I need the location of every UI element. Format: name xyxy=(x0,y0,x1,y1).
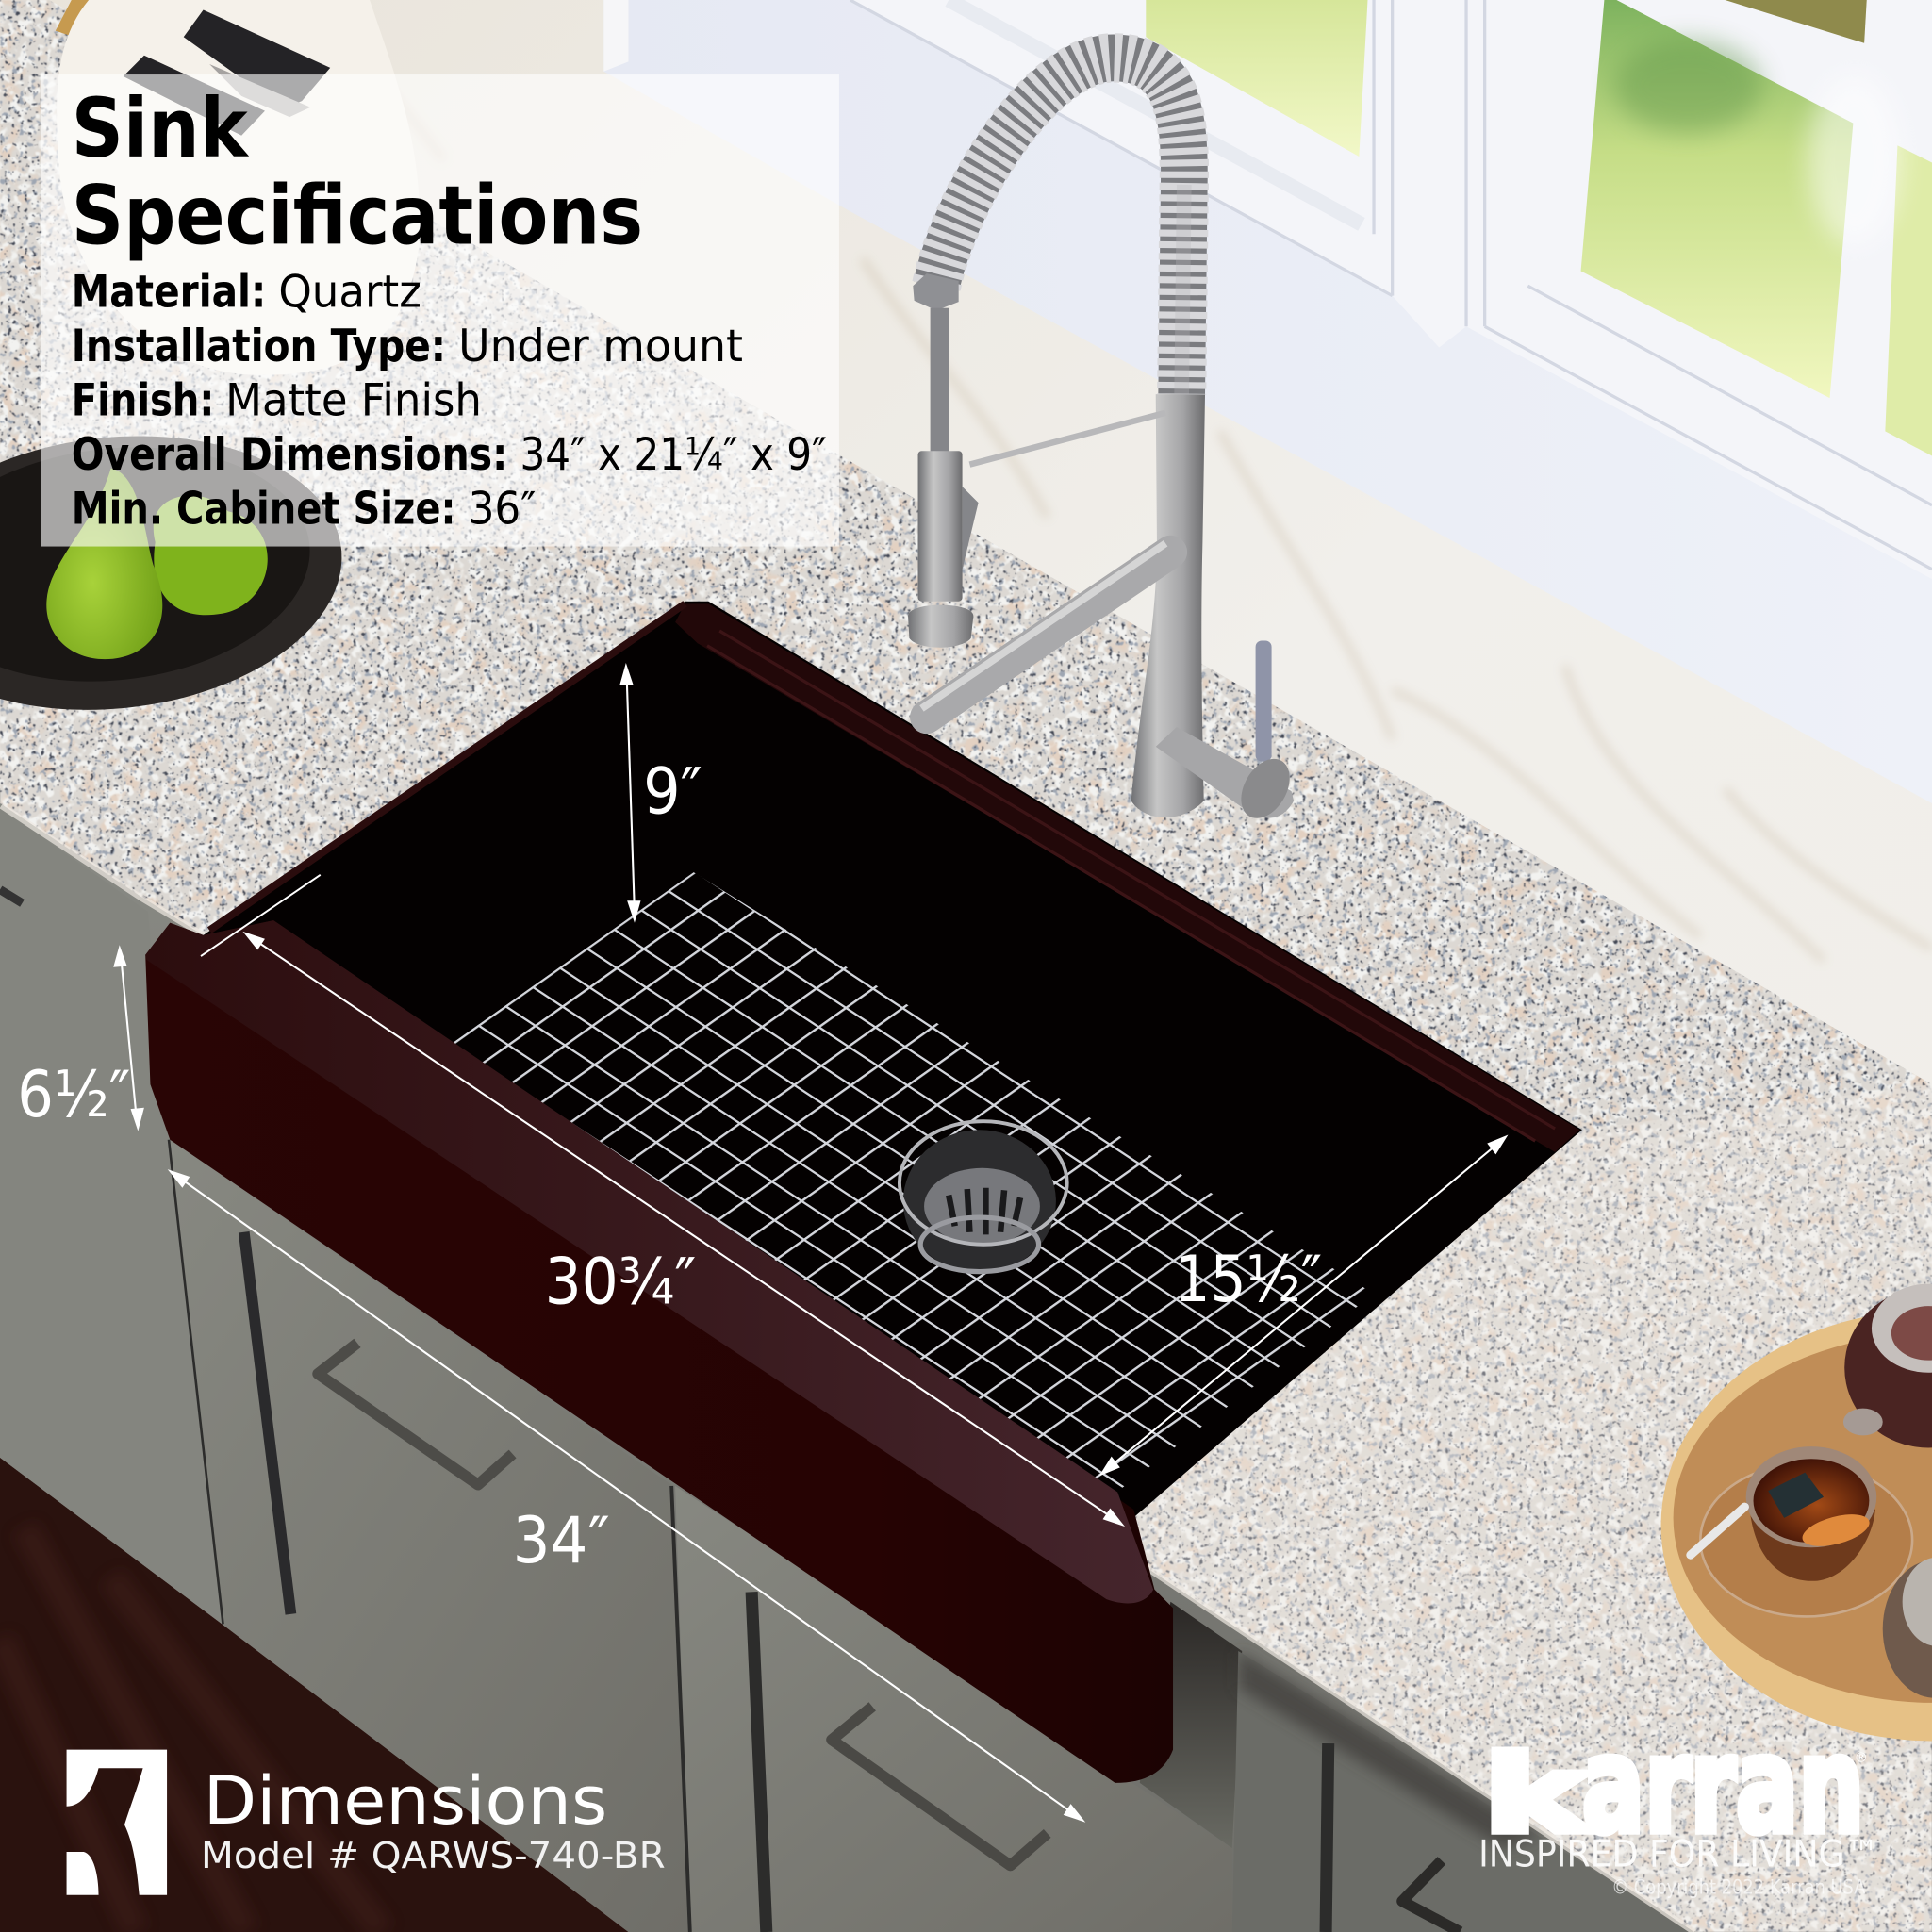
specifications list: Finish: xyxy=(72,374,214,426)
window pane: upper right xyxy=(1725,0,1867,43)
sink xyxy=(145,602,1582,1783)
window pane: left xyxy=(1146,0,1368,157)
title: Sink xyxy=(72,82,249,176)
arrow: 34 inch xyxy=(168,1169,1085,1823)
copyright: © Copyright 2022 Karran USA xyxy=(1611,1875,1866,1898)
counter right side light wash xyxy=(1128,1084,1932,1932)
logo mark xyxy=(67,1750,167,1895)
faucet xyxy=(908,58,1299,827)
apron xyxy=(145,920,1173,1783)
tray with tea xyxy=(1661,1284,1932,1741)
specifications list: 34″ x 21¼″ x 9″ xyxy=(520,429,827,481)
spout arm xyxy=(927,552,1170,718)
hose xyxy=(931,308,949,454)
interior base xyxy=(204,602,1582,1523)
handle two xyxy=(832,1707,1048,1865)
support rod xyxy=(969,413,1165,465)
label: 6 1/2 inch: 6½″ xyxy=(17,1058,131,1132)
karran logo: ® xyxy=(1855,1751,1868,1766)
specifications list: Under mount xyxy=(458,321,743,372)
dimension arrows and labels xyxy=(17,663,1508,1823)
counter edge highlight xyxy=(1,806,1694,1932)
model number: Model # QARWS-740-BR xyxy=(201,1835,666,1876)
title xyxy=(72,82,643,264)
window pane: far right xyxy=(1885,145,1932,456)
apron lip xyxy=(145,920,1153,1603)
left cabinet door xyxy=(0,807,222,1624)
door one xyxy=(170,1140,690,1932)
left rim xyxy=(209,603,685,931)
door three xyxy=(1232,1651,1694,1932)
side panel xyxy=(1140,1602,1242,1848)
arrow: 9 inch depth xyxy=(619,663,641,923)
rear rim xyxy=(675,603,1579,1152)
arrow: 30 3/4 inch xyxy=(242,932,1125,1527)
handle one xyxy=(318,1343,513,1485)
cabinets xyxy=(0,739,1932,1932)
specifications list: Min. Cabinet Size: xyxy=(72,483,456,535)
teacup xyxy=(1691,1446,1876,1581)
dimensions heading: Dimensions xyxy=(204,1762,607,1840)
teapot xyxy=(1843,1284,1932,1447)
label: 30 3/4 inch: 30¾″ xyxy=(545,1246,696,1320)
coil spring xyxy=(936,58,1184,394)
wire rack xyxy=(450,872,1374,1494)
karran logo: k xyxy=(1483,1733,1590,1857)
specifications list: Matte Finish xyxy=(225,374,482,426)
sun glare xyxy=(1808,74,1901,246)
door two xyxy=(675,1486,1232,1932)
mixer body xyxy=(1156,727,1299,827)
window frame xyxy=(850,0,1932,579)
specifications list xyxy=(72,266,827,535)
plate xyxy=(0,414,355,732)
title: Specifications xyxy=(72,170,643,264)
glass xyxy=(1883,1558,1932,1698)
tagline: INSPIRED FOR LIVING™ xyxy=(1478,1834,1879,1876)
specifications list: Installation Type: xyxy=(72,321,446,372)
floor xyxy=(0,1458,628,1932)
tick mark xyxy=(201,875,321,956)
toaster xyxy=(56,0,420,375)
sill molding xyxy=(603,0,628,72)
pears xyxy=(46,469,268,659)
specifications list: Overall Dimensions: xyxy=(72,429,507,481)
label: 9 inch: 9″ xyxy=(643,754,702,829)
specifications list: Material: xyxy=(72,266,266,318)
base column xyxy=(1131,394,1205,817)
arrow: 15 1/2 inch xyxy=(1099,1135,1508,1476)
window pane: centre xyxy=(1581,0,1853,398)
lever xyxy=(1256,641,1272,762)
drain xyxy=(900,1121,1067,1273)
handle three xyxy=(1402,1860,1461,1932)
window sill xyxy=(603,0,1932,803)
label: 34 inch: 34″ xyxy=(513,1504,610,1578)
karran logo xyxy=(1478,1709,1879,1898)
label: 15 1/2 inch: 15½″ xyxy=(1174,1243,1322,1317)
arrow: 6 1/2 inch xyxy=(113,945,144,1131)
specifications list: Quartz xyxy=(278,266,421,318)
saucer xyxy=(1700,1463,1912,1616)
coil end cap xyxy=(913,273,959,310)
specifications list: 36″ xyxy=(469,483,536,535)
info panel xyxy=(41,74,839,547)
sprayer head xyxy=(908,451,979,648)
